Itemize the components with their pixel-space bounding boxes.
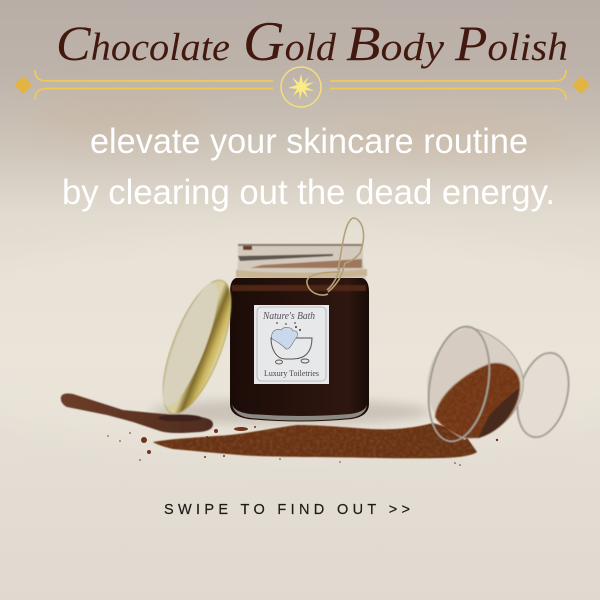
cup bowl <box>467 327 523 438</box>
cup foot <box>509 347 577 443</box>
product label <box>254 305 329 384</box>
title <box>56 11 568 73</box>
title: Body <box>346 15 445 71</box>
title: Gold <box>243 11 337 73</box>
tagline line 2: by clearing out the dead energy. <box>62 173 555 212</box>
jar glass rim <box>236 244 367 280</box>
cup interior glass <box>427 328 491 440</box>
icon: right diamond <box>572 76 590 94</box>
tagline line 1: elevate your skincare routine <box>90 122 528 161</box>
ornament divider <box>14 67 590 107</box>
call to action: SWIPE TO FIND OUT >> <box>164 502 410 518</box>
title: Chocolate <box>56 15 230 71</box>
title: Polish <box>454 15 568 71</box>
label brand: Nature's Bath <box>262 311 315 322</box>
spilled cocoa powder <box>107 423 498 466</box>
icon: bathtub <box>271 322 312 364</box>
cup rim <box>420 322 498 446</box>
jar lid <box>149 272 245 422</box>
powder specks <box>107 426 498 466</box>
cup inner powder <box>435 363 520 438</box>
icon: star medallion <box>281 67 321 107</box>
label subtitle: Luxury Toiletries <box>264 369 319 378</box>
tagline <box>62 122 555 212</box>
shadows on surface <box>150 399 430 425</box>
wooden spoon <box>61 393 213 433</box>
jute twine <box>307 218 364 295</box>
icon: left diamond <box>14 76 32 94</box>
jar body <box>230 278 369 422</box>
glass cup <box>420 322 577 446</box>
jar <box>230 218 369 422</box>
